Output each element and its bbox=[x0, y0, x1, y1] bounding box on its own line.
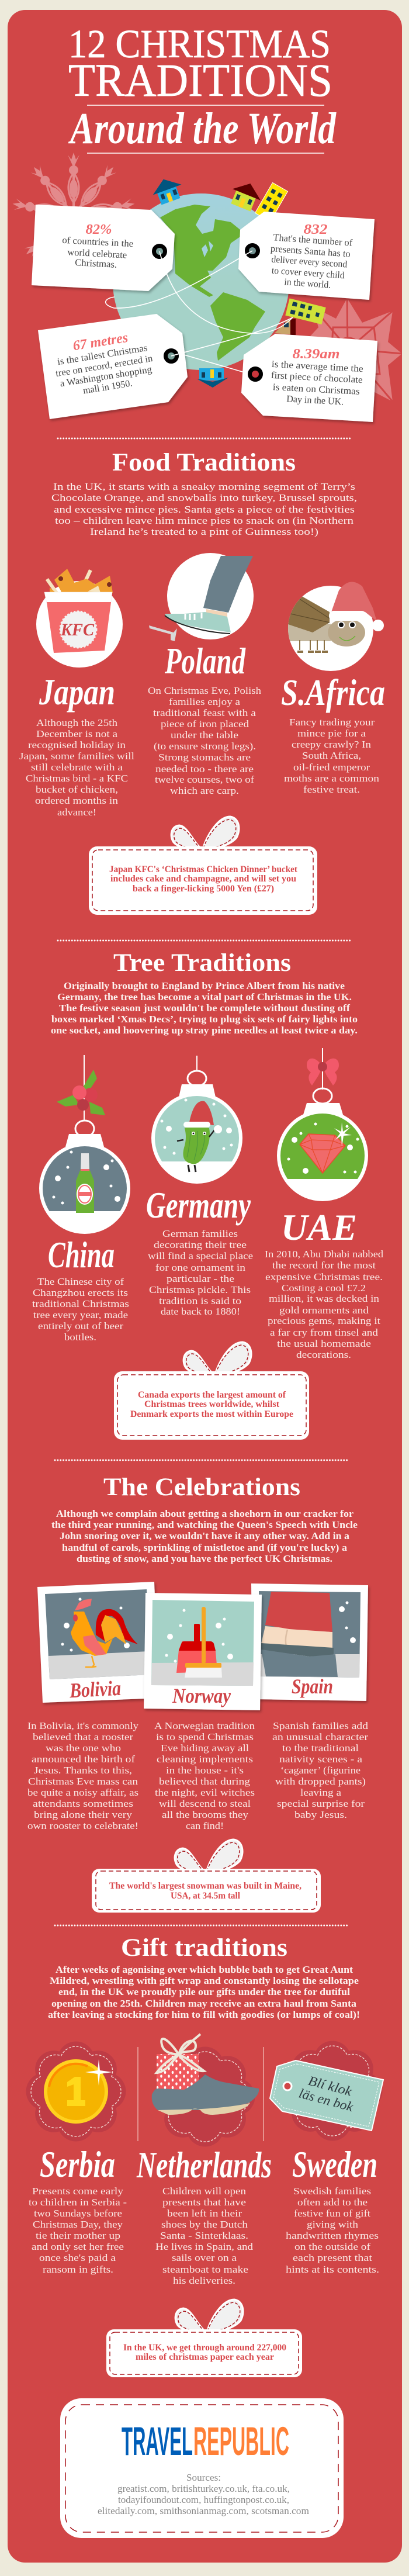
tag: 8.39am: first piece of chocolate bbox=[271, 369, 363, 385]
section intro: gifts: After weeks of agonising over which bubble bath to get Great Aunt bbox=[56, 1964, 353, 1975]
text: Spain: leaving a bbox=[300, 1787, 342, 1798]
text: Japan: still celebrate with a bbox=[31, 762, 123, 773]
tag: 67 metres: a Washington shopping bbox=[59, 364, 152, 389]
polaroid: Bolivia rooster: Bolivia bbox=[68, 1676, 122, 1702]
text: Germany: date back to 1880! bbox=[161, 1306, 240, 1317]
text: Netherlands: Santa - Sinterklaas. bbox=[160, 2230, 248, 2241]
text: Serbia: Christmas Day, they bbox=[33, 2219, 123, 2230]
icon: green house bbox=[227, 178, 265, 213]
text: Sweden: hints at its contents. bbox=[286, 2264, 379, 2275]
text: Spain: baby Jesus. bbox=[294, 1809, 347, 1820]
text: Sweden: Swedish families bbox=[293, 2186, 371, 2197]
text: Bolivia: In Bolivia, it's commonly bbox=[27, 1720, 139, 1731]
text: UAE: Costing a cool £7.2 bbox=[282, 1282, 366, 1294]
section intro: celebrations: dusting of snow, and you have the perfect UK Christmas. bbox=[77, 1553, 332, 1564]
section intro: tree bbox=[51, 980, 358, 1036]
text: UAE: a far cry from tinsel and bbox=[270, 1327, 379, 1338]
text: Serbia: once she's paid a bbox=[39, 2252, 116, 2263]
text: Spain: an unusual character bbox=[272, 1731, 368, 1742]
polaroid: Spain caganer: Spain bbox=[292, 1675, 333, 1698]
text: Japan bbox=[19, 717, 134, 818]
text: Netherlands: Children will open bbox=[162, 2186, 247, 2197]
text: sources: Sources: bbox=[186, 2472, 221, 2483]
text: South Africa: Fancy trading your bbox=[289, 717, 375, 728]
section intro: food bbox=[51, 481, 357, 537]
text: Norway: can find! bbox=[186, 1820, 224, 1831]
callout: KFC gift box bbox=[89, 817, 317, 915]
text: Serbia bbox=[29, 2186, 127, 2275]
text: Spain: ‘caganer’ (figurine bbox=[280, 1765, 361, 1776]
section intro: tree: Germany, the tree has become a vital part of Christmas in the UK. bbox=[57, 991, 352, 1002]
country label: Germany: Germany bbox=[146, 1185, 251, 1226]
icon: brown house bbox=[275, 319, 296, 335]
text: Germany: for one ornament in bbox=[155, 1262, 246, 1273]
text: Germany: tradition is said to bbox=[159, 1295, 241, 1306]
text: sources: greatist.com, britishturkey.co.uk, fta.co.uk, bbox=[117, 2483, 290, 2494]
section intro: celebrations: Although we complain about getting a shoehorn in our cracker for bbox=[56, 1508, 353, 1519]
text: Japan: Although the 25th bbox=[36, 717, 118, 728]
icon: Polish leg stepping on iron bbox=[149, 553, 254, 641]
text: Norway: the night, evil witches bbox=[155, 1787, 255, 1798]
globe bbox=[113, 193, 289, 370]
text: Germany: Christmas pickle. This bbox=[149, 1284, 251, 1295]
section intro: food: too – children leave him mince pies to snack on (in Northern bbox=[55, 515, 354, 526]
country label: China: China bbox=[48, 1235, 115, 1275]
text: Sweden: handwritten rhymes bbox=[286, 2230, 379, 2241]
text: Poland: twelve courses, two of bbox=[155, 774, 254, 785]
tag: 8.39am: Day in the UK. bbox=[286, 393, 344, 407]
text: Japan: bucket of chicken, bbox=[36, 784, 118, 795]
text: UAE: expensive Christmas tree. bbox=[265, 1271, 383, 1282]
text: Poland: needed too - there are bbox=[155, 763, 254, 774]
text: Spain: nativity scenes - a bbox=[279, 1754, 363, 1765]
text: Sweden: on the outside of bbox=[294, 2241, 370, 2252]
text: UAE: million, it was decked in bbox=[269, 1293, 380, 1304]
section intro: celebrations: handful of carols, sprinkling of mistletoe and (if you're lucky) a bbox=[62, 1542, 348, 1553]
text: Netherlands: been left in their bbox=[167, 2208, 242, 2219]
text: Sweden bbox=[286, 2186, 379, 2275]
tag: 832 presents: 832 bbox=[304, 222, 327, 237]
text: Poland: traditional feast with a bbox=[153, 707, 257, 718]
text: Netherlands: sails over on a bbox=[172, 2252, 237, 2263]
tag: 832 presents: to cover every child bbox=[271, 265, 345, 281]
tag: 67 metres: 67 metres bbox=[72, 330, 129, 354]
icon: Sweden gift tag: Blí klok bbox=[307, 2073, 354, 2099]
text: Norway: Eve hiding away all bbox=[161, 1742, 249, 1754]
tag: 832 presents bbox=[238, 212, 375, 300]
text: Germany bbox=[148, 1228, 253, 1317]
text: Spain: with dropped pants) bbox=[275, 1776, 366, 1787]
text: Bolivia bbox=[27, 1720, 139, 1831]
text: Japan: advance! bbox=[57, 807, 96, 818]
text: Poland: which are carp. bbox=[170, 785, 239, 796]
text: South Africa bbox=[284, 717, 380, 795]
icon: lime building bbox=[285, 298, 326, 324]
text: Serbia: two Sundays before bbox=[34, 2208, 122, 2219]
text: China bbox=[32, 1276, 129, 1343]
section intro: food: Ireland he’s treated to a pint of Guinness too!) bbox=[90, 526, 318, 537]
callout: Canada gift box: Canada exports the largest amount of bbox=[138, 1390, 286, 1400]
panel: sources and logo bbox=[60, 2398, 344, 2538]
text: Bolivia: announced the birth of bbox=[32, 1754, 135, 1765]
divider bbox=[55, 1924, 349, 1927]
text: Poland bbox=[148, 685, 262, 796]
tag: 82 percent: Christmas. bbox=[75, 257, 117, 270]
text: Netherlands: He lives in Spain, and bbox=[155, 2241, 254, 2252]
text: Serbia: Presents come early bbox=[32, 2186, 124, 2197]
callout: KFC gift box: Japan KFC's ‘Christmas Chicken Dinner’ bucket bbox=[109, 865, 298, 874]
text: Norway: is to spend Christmas bbox=[156, 1731, 254, 1742]
text: Sweden: each present that bbox=[293, 2252, 372, 2263]
text: Norway: in the house - it's bbox=[166, 1765, 244, 1776]
text: Netherlands: steamboat to make bbox=[162, 2264, 248, 2275]
text: Bolivia: be quite a noisy affair, as bbox=[27, 1787, 138, 1798]
icon: emperor moth in Santa hat bbox=[286, 582, 384, 671]
callout: Canada gift box: Denmark exports the most within Europe bbox=[130, 1409, 293, 1419]
callout: wrapping paper gift box: miles of christmas paper each year bbox=[136, 2352, 274, 2362]
tag: 67 metres bbox=[38, 314, 188, 419]
section intro: gifts: after leaving a stocking for him to fill with goodies (or lumps of coal)! bbox=[48, 2009, 360, 2020]
icon: KFC bucket bbox=[36, 569, 123, 668]
text: Germany: particular - the bbox=[167, 1273, 234, 1284]
text: Poland: On Christmas Eve, Polish bbox=[148, 685, 262, 696]
callout: wrapping paper gift box: In the UK, we get through around 227,000 bbox=[123, 2343, 286, 2353]
tag: 832 presents: deliver every second bbox=[271, 254, 348, 270]
text: China: Changzhou erects its bbox=[33, 1287, 128, 1298]
text: Japan: ordered months in bbox=[35, 795, 119, 806]
section intro: tree: Originally brought to England by Prince Albert from his native bbox=[64, 980, 345, 991]
polaroid: Norway broom bbox=[144, 1593, 262, 1710]
text: UAE: the record for the most bbox=[272, 1260, 376, 1271]
text: Norway bbox=[154, 1720, 255, 1831]
title: TRADITIONS bbox=[68, 56, 332, 106]
tag: 82 percent bbox=[32, 205, 175, 291]
text: Japan: December is not a bbox=[36, 728, 118, 739]
text: Poland: (to ensure strong legs). bbox=[154, 741, 256, 752]
section intro: food: In the UK, it starts with a sneaky morning segment of Terry’s bbox=[53, 481, 355, 492]
section intro: gifts: opening on the 25th. Children may receive an extra haul from Santa bbox=[51, 1998, 357, 2009]
text: Netherlands: presents that have bbox=[162, 2197, 246, 2208]
text: UAE: precious gems, making it bbox=[268, 1315, 380, 1326]
text: Netherlands: shoes by the Dutch bbox=[161, 2219, 248, 2230]
text: Spain: special surprise for bbox=[277, 1798, 365, 1809]
tag: 8.39am bbox=[241, 334, 377, 422]
text: Bolivia: bring alone their very bbox=[34, 1809, 133, 1820]
text: Poland: families enjoy a bbox=[169, 696, 241, 707]
tag: 67 metres: tree on record, erected in bbox=[55, 352, 154, 379]
callout: snowman gift box bbox=[92, 1839, 321, 1913]
text: UAE: decorations. bbox=[296, 1349, 351, 1360]
country label: Sweden: Sweden bbox=[292, 2144, 377, 2185]
text: Serbia: tie their mother up bbox=[36, 2230, 120, 2241]
divider bbox=[58, 940, 352, 941]
text: Bolivia: believed that a rooster bbox=[33, 1731, 133, 1742]
text: South Africa: creepy crawly? In bbox=[292, 739, 372, 750]
text: Poland: Strong stomachs are bbox=[158, 752, 251, 763]
text: South Africa: festive treat. bbox=[303, 784, 360, 795]
icon: Netherlands clog with present bbox=[152, 2034, 259, 2146]
text: Serbia: ransom in gifts. bbox=[43, 2264, 113, 2275]
text: sources bbox=[98, 2472, 309, 2516]
tag: 832 presents: in the world. bbox=[284, 276, 331, 291]
polaroid: Bolivia rooster bbox=[37, 1582, 159, 1703]
text: Bolivia: Christmas Eve mass can bbox=[28, 1776, 138, 1787]
text: South Africa: oil-fried emperor bbox=[293, 762, 370, 773]
column dividers bbox=[138, 2047, 264, 2141]
country label: Japan: Japan bbox=[39, 672, 115, 713]
callout: Canada gift box: Christmas trees worldwide, whilst bbox=[144, 1399, 280, 1409]
country label: Serbia: Serbia bbox=[40, 2144, 115, 2185]
text: Norway: all the brooms they bbox=[162, 1809, 249, 1820]
tag: 8.39am: 8.39am bbox=[292, 347, 340, 362]
tag: 8.39am: is eaten on Christmas bbox=[272, 381, 360, 397]
text: Netherlands: his deliveries. bbox=[173, 2275, 235, 2286]
section heading: gift traditions: Gift traditions bbox=[121, 1934, 287, 1962]
text: sources: elitedaily.com, smithsonianmag.com, scotsman.com bbox=[98, 2505, 309, 2516]
text: UAE: In 2010, Abu Dhabi nabbed bbox=[265, 1249, 384, 1260]
polaroid: Spain caganer bbox=[251, 1583, 368, 1701]
ornament: UAE diamond bbox=[277, 1048, 368, 1201]
section intro: gifts: Mildred, wrestling with gift wrap and constantly losing the sellotape bbox=[50, 1975, 359, 1986]
text: Serbia: to children in Serbia - bbox=[29, 2197, 127, 2208]
tag: 8.39am: is the average time the bbox=[271, 358, 363, 374]
callout: snowman gift box: The world's largest snowman was built in Maine, bbox=[109, 1881, 301, 1891]
title bbox=[68, 22, 337, 153]
icon: yellow tower bbox=[255, 182, 287, 222]
text: Poland: under the table bbox=[171, 729, 238, 741]
country label: UAE: UAE bbox=[281, 1207, 357, 1248]
text: Norway: cleaning implements bbox=[157, 1754, 253, 1765]
tag: 67 metres: mall in 1950. bbox=[82, 378, 133, 396]
section intro: gifts bbox=[48, 1964, 360, 2020]
text: sources: todayifoundout.com, huffingtonpost.co.uk, bbox=[118, 2494, 289, 2505]
text: Sweden: giving with bbox=[307, 2219, 359, 2230]
text: China: The Chinese city of bbox=[37, 1276, 124, 1287]
text: China: entirely out of beer bbox=[38, 1320, 123, 1332]
ornament: Germany pickle bbox=[151, 1056, 242, 1184]
text: Japan: recognised holiday in bbox=[28, 739, 126, 751]
text: Spain bbox=[272, 1720, 369, 1820]
section intro: celebrations: John snoring over it, we wouldn't have it any other way. Add in a bbox=[60, 1530, 350, 1541]
text: UAE: gold ornaments and bbox=[279, 1305, 369, 1316]
icon: Sweden gift tag: läs en bok bbox=[297, 2086, 355, 2114]
text: Japan: Christmas bird - a KFC bbox=[26, 773, 128, 784]
icon: upside-down blue house bbox=[197, 368, 228, 388]
section intro: celebrations: the third year running, and watching the Queen's Speech with Uncle bbox=[51, 1519, 358, 1530]
callout: KFC gift box: back a finger-licking 5000 Yen (£27) bbox=[133, 884, 274, 894]
text: Norway: A Norwegian tradition bbox=[154, 1720, 255, 1731]
section intro: food: Chocolate Orange, and snowballs into turkey, Brussel sprouts, bbox=[51, 492, 357, 503]
divider bbox=[58, 437, 352, 440]
text: Bolivia: own rooster to celebrate! bbox=[27, 1820, 138, 1831]
icon: right snowflake bbox=[310, 299, 401, 400]
section intro: food: and excessive mince pies. Santa gets a piece of the festivities bbox=[54, 504, 355, 515]
tag: 832 presents: presents Santa has to bbox=[270, 243, 351, 260]
country label: Netherlands: Netherlands bbox=[136, 2145, 272, 2186]
text: Bolivia: attendants sometimes bbox=[33, 1798, 133, 1809]
section intro: gifts: end, in the UK we proudly pile our gifts under the tree for dutiful bbox=[58, 1986, 350, 1997]
text: Norway: will descend to steal bbox=[159, 1798, 251, 1809]
callout: KFC gift box: includes cake and champagne, and will set you bbox=[110, 874, 296, 884]
text: Germany: German families bbox=[162, 1228, 238, 1239]
text: Sweden: festive fun of gift bbox=[294, 2208, 370, 2219]
tag: 67 metres: is the tallest Christmas bbox=[57, 342, 148, 367]
text: China: traditional Christmas bbox=[32, 1298, 129, 1309]
text: Japan: Japan, some families will bbox=[19, 751, 134, 762]
text: Spain: Spanish families add bbox=[273, 1720, 369, 1731]
panel: sources and logo: REPUBLIC bbox=[193, 2419, 289, 2464]
section intro: tree: boxes marked ‘Xmas Decs’, trying to plug six sets of fairy lights into bbox=[51, 1014, 358, 1025]
section heading: food traditions: Food Traditions bbox=[112, 449, 296, 476]
text: Spain: to the traditional bbox=[282, 1742, 359, 1754]
text: Sweden: often add to the bbox=[297, 2197, 368, 2208]
ornament: China beer bottle bbox=[39, 1055, 130, 1234]
callout: snowman gift box: USA, at 34.5m tall bbox=[171, 1891, 241, 1901]
tag: 82 percent: of countries in the bbox=[62, 234, 134, 249]
text: South Africa: moths are a common bbox=[284, 773, 380, 784]
text: South Africa: mince pie for a bbox=[297, 728, 366, 739]
title: 12 CHRISTMAS bbox=[68, 22, 331, 66]
icon: Serbia gold coin bbox=[26, 2042, 126, 2141]
icon: Sweden gift tag bbox=[270, 2041, 383, 2141]
section intro: tree: The festive season just wouldn't be complete without dusting off bbox=[59, 1002, 350, 1014]
text: Bolivia: Jesus. Thanks to this, bbox=[34, 1765, 132, 1776]
callout: Canada gift box bbox=[114, 1342, 309, 1440]
text: Poland: piece of iron placed bbox=[161, 718, 249, 729]
tag strings bbox=[106, 251, 293, 372]
icon: KFC bucket: KFC bbox=[60, 620, 95, 639]
text: UAE: the usual homemade bbox=[277, 1338, 371, 1349]
section intro: celebrations bbox=[51, 1508, 358, 1564]
country label: Poland: Poland bbox=[164, 641, 246, 682]
divider bbox=[55, 1459, 349, 1461]
section heading: the celebrations: The Celebrations bbox=[103, 1474, 300, 1501]
text: Norway: believed that during bbox=[159, 1776, 251, 1787]
text: China: bottles. bbox=[64, 1332, 96, 1343]
section heading: tree traditions: Tree Traditions bbox=[113, 949, 291, 977]
callout: wrapping paper gift box bbox=[106, 2300, 302, 2377]
section intro: tree: one socket, and hoovering up stray pine needles at least twice a day. bbox=[51, 1025, 358, 1036]
polaroid: Norway broom: Norway bbox=[172, 1684, 231, 1707]
text: Germany: decorating their tree bbox=[154, 1239, 247, 1250]
country label: South Africa: S.Africa bbox=[281, 672, 385, 713]
text: Serbia: and only set her free bbox=[32, 2241, 124, 2252]
text: UAE bbox=[265, 1249, 384, 1360]
text: South Africa: South Africa, bbox=[302, 750, 361, 761]
icon: left snowflake bbox=[12, 153, 136, 276]
tag: 82 percent: 82% bbox=[85, 222, 112, 237]
text: Germany: will find a special place bbox=[148, 1250, 253, 1261]
text: Netherlands bbox=[155, 2186, 254, 2286]
text: China: tree every year, made bbox=[33, 1309, 128, 1320]
logo: Travel Republic: TRAVEL bbox=[122, 2419, 193, 2464]
title: Around the World bbox=[68, 104, 337, 153]
tag: 82 percent: world celebrate bbox=[67, 246, 127, 261]
tag: 832 presents: That's the number of bbox=[273, 231, 353, 248]
text: Bolivia: was the one who bbox=[46, 1742, 121, 1754]
icon: blue house bbox=[149, 174, 186, 206]
